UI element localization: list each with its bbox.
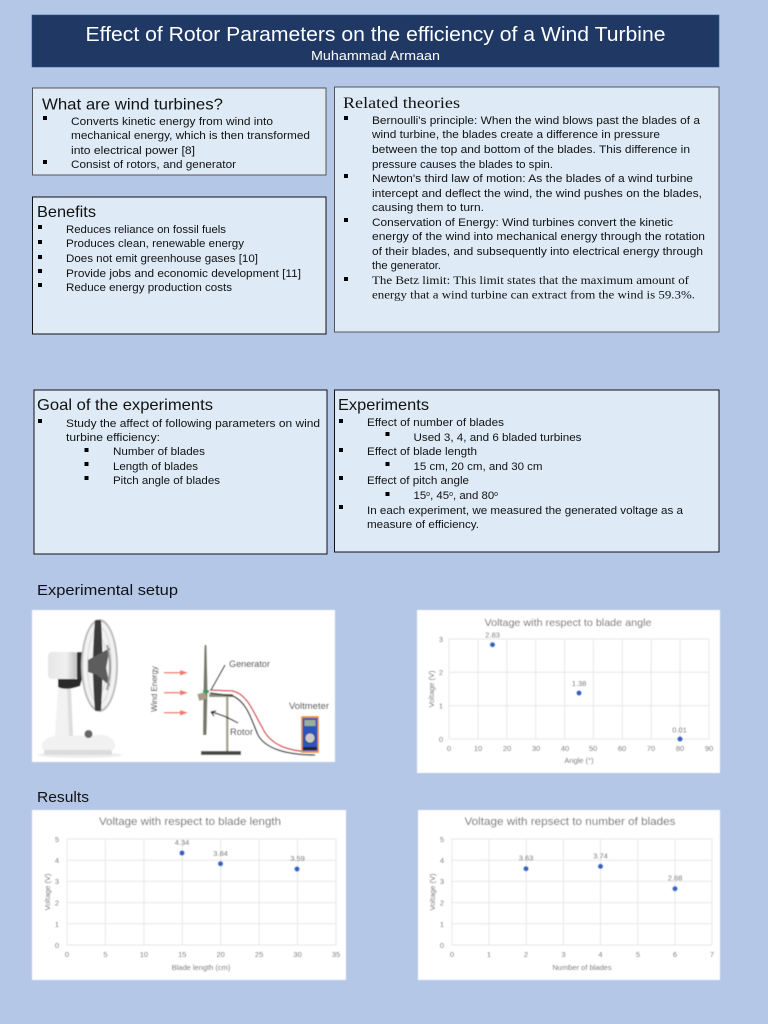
heading: What are wind turbines? (42, 96, 223, 114)
bullet list (43, 116, 310, 171)
bullet list (38, 224, 301, 294)
axis labels: Voltage (V) (43, 873, 52, 911)
axis labels: 0 (440, 941, 444, 950)
bullet list: Consist of rotors, and generator (71, 159, 236, 171)
panel: experiments (334, 390, 719, 552)
axis labels: 0 (439, 735, 443, 744)
bullet list: measure of efficiency. (367, 519, 479, 531)
axis labels: 4 (598, 950, 603, 959)
axis labels: 90 (705, 744, 713, 753)
wires (210, 690, 316, 755)
labels (229, 659, 329, 737)
bullet list: into electrical power [8] (71, 145, 195, 157)
axis labels: 20 (217, 950, 225, 959)
axis labels: 30 (532, 744, 540, 753)
axis labels: 3 (55, 877, 59, 886)
axis labels: 20 (503, 744, 511, 753)
data points: 3.84 (213, 849, 228, 858)
bullet list: Effect of pitch angle (367, 475, 469, 487)
axis labels: 6 (673, 950, 677, 959)
bullet list: energy of the wind into mechanical energy through the rotation (372, 231, 705, 243)
labels: Rotor (230, 727, 253, 737)
axis labels: 5 (103, 950, 107, 959)
bullet list: wind turbine, the blades create a difference in pressure (371, 129, 660, 141)
axis labels: 5 (440, 835, 444, 844)
heading: results: Results (37, 789, 89, 806)
chart: voltage vs number of blades (418, 810, 720, 980)
axis labels: 7 (710, 950, 714, 959)
axis labels: Blade length (cm) (172, 963, 231, 972)
axis labels: 2 (55, 898, 59, 908)
bullet list: Produces clean, renewable energy (66, 238, 244, 250)
axis labels: 1 (487, 950, 491, 959)
bullet list: Used 3, 4, and 6 bladed turbines (414, 432, 582, 444)
data points: 3.59 (290, 854, 305, 863)
axis labels: 0 (55, 941, 59, 950)
axis labels: 0 (65, 950, 69, 959)
data points: 2.83 (485, 630, 500, 640)
axis labels: 3 (439, 635, 443, 644)
panel: what are wind turbines (32, 88, 326, 175)
bullet list: Effect of number of blades (367, 417, 504, 429)
data points: 1.38 (572, 679, 586, 688)
axis labels: 0 (447, 744, 451, 753)
axis labels: 60 (618, 744, 626, 753)
grid (67, 839, 336, 945)
panel: benefits (32, 197, 326, 334)
bullet list: intercept and deflect the wind, the wind pushes on the blades, (372, 188, 702, 200)
axis labels (428, 835, 714, 972)
panel: goal of the experiments (34, 390, 327, 554)
bullet list: Number of blades (113, 446, 205, 458)
bullet list: of their blades, and subsequently into electrical energy through (372, 246, 703, 258)
axis labels: 2 (524, 950, 528, 959)
callout arrows (211, 665, 238, 723)
bullet list: Conservation of Energy: Wind turbines convert the kinetic (372, 217, 673, 229)
axis labels: 50 (589, 744, 597, 753)
bullet list: Newton's third law of motion: As the blades of a wind turbine (372, 173, 693, 185)
bullet list: between the top and bottom of the blades. This difference in (372, 144, 690, 156)
bullet list: o (494, 491, 498, 498)
bullet list: 15 cm, 20 cm, and 30 cm (414, 461, 542, 473)
axis labels: 1 (440, 920, 444, 929)
bullet list: In each experiment, we measured the generated voltage as a (367, 505, 684, 517)
axis labels: 1 (439, 702, 443, 710)
turbine with stand (197, 645, 241, 755)
axis labels (427, 635, 713, 765)
data points: 4.34 (175, 838, 189, 847)
panel: related theories (334, 87, 719, 332)
bullet list: 15 (414, 490, 426, 502)
grid (449, 639, 709, 739)
data points (175, 838, 305, 872)
chart title: Voltage with respect to blade length (99, 816, 281, 828)
data points: 3.63 (519, 854, 533, 862)
bullet list: Study the affect of following parameters on wind (66, 418, 320, 430)
data points: 2.68 (668, 874, 682, 882)
heading: Related theories (343, 95, 460, 112)
axis labels: Voltage (V) (428, 873, 437, 911)
bullet list: Does not emit greenhouse gases [10] (66, 253, 258, 265)
icon: desk fan (38, 619, 122, 758)
data points (485, 630, 687, 742)
axis labels: 5 (636, 950, 640, 959)
chart: voltage vs blade angle (417, 610, 720, 773)
bullet list: The Betz limit: This limit states that the maximum amount of (372, 275, 689, 287)
axis labels: 1 (55, 920, 59, 929)
panel: experimental setup diagram (32, 610, 335, 762)
data points (519, 852, 682, 891)
labels: Voltmeter (289, 701, 329, 711)
bullet list: o (426, 491, 430, 498)
bullet list: Reduces reliance on fossil fuels (66, 224, 226, 236)
bullet list: , and 80 (453, 490, 494, 502)
axis labels: 0 (450, 950, 454, 959)
chart title: Voltage with respect to blade angle (484, 617, 652, 629)
bullet list: , 45 (430, 490, 449, 502)
label: wind energy: Wind Energy (150, 666, 159, 712)
bullet list: turbine efficiency: (66, 432, 160, 444)
labels: Generator (229, 659, 270, 669)
axis labels: Voltage (V) (427, 670, 436, 708)
axis labels: 5 (55, 835, 59, 844)
title: Effect of Rotor Parameters on the efficiency of a Wind Turbine (86, 23, 666, 46)
bullet list: the generator. (372, 260, 441, 272)
bullet list: Effect of blade length (367, 446, 477, 458)
bullet list: mechanical energy, which is then transformed (71, 130, 310, 142)
heading: Benefits (37, 204, 96, 221)
axis labels: 3 (440, 877, 444, 886)
bullet list: causing them to turn. (372, 202, 484, 214)
bullet list: Pitch angle of blades (113, 475, 220, 487)
bullet list: o (449, 491, 453, 498)
bullet list: Reduce energy production costs (66, 282, 232, 294)
bullet list: pressure causes the blades to spin. (372, 159, 553, 171)
author: Muhammad Armaan (311, 48, 440, 63)
heading: experimental setup: Experimental setup (37, 582, 178, 599)
bullet list: Bernoulli's principle: When the wind blows past the blades of a (372, 115, 701, 127)
icon: voltmeter (301, 716, 319, 753)
bullet list: energy that a wind turbine can extract from the wind is 59.3%. (372, 290, 695, 302)
data points: 0.01 (672, 726, 687, 734)
axis labels (43, 835, 340, 972)
data points: 3.74 (593, 852, 608, 860)
grid (452, 839, 712, 945)
heading: Goal of the experiments (37, 397, 213, 414)
bullet list (339, 417, 684, 531)
axis labels: 25 (255, 950, 263, 959)
axis labels: 2 (440, 898, 444, 908)
axis labels: 80 (676, 744, 684, 753)
title banner (32, 15, 719, 67)
chart title: Voltage with repsect to number of blades (464, 816, 676, 828)
bullet list: Converts kinetic energy from wind into (71, 116, 273, 128)
axis labels: 4 (55, 856, 59, 865)
bullet list (344, 115, 705, 302)
axis labels: 35 (332, 950, 340, 959)
axis labels: 30 (293, 950, 302, 959)
axis labels: 4 (440, 856, 444, 865)
arrows: wind (164, 670, 188, 716)
axis labels: Number of blades (552, 963, 612, 972)
bullet list: Provide jobs and economic development [11] (66, 268, 301, 280)
axis labels: 40 (561, 744, 569, 753)
heading: Experiments (338, 397, 429, 414)
axis labels: 10 (140, 950, 148, 959)
axis labels: Angle (°) (564, 756, 594, 765)
bullet list: Length of blades (113, 461, 198, 473)
axis labels: 15 (178, 950, 186, 959)
axis labels: 10 (474, 744, 482, 753)
axis labels: 70 (647, 744, 655, 753)
chart: voltage vs blade length (32, 810, 346, 980)
axis labels: 3 (561, 950, 566, 959)
bullet list (38, 418, 320, 487)
axis labels: 2 (439, 668, 443, 677)
